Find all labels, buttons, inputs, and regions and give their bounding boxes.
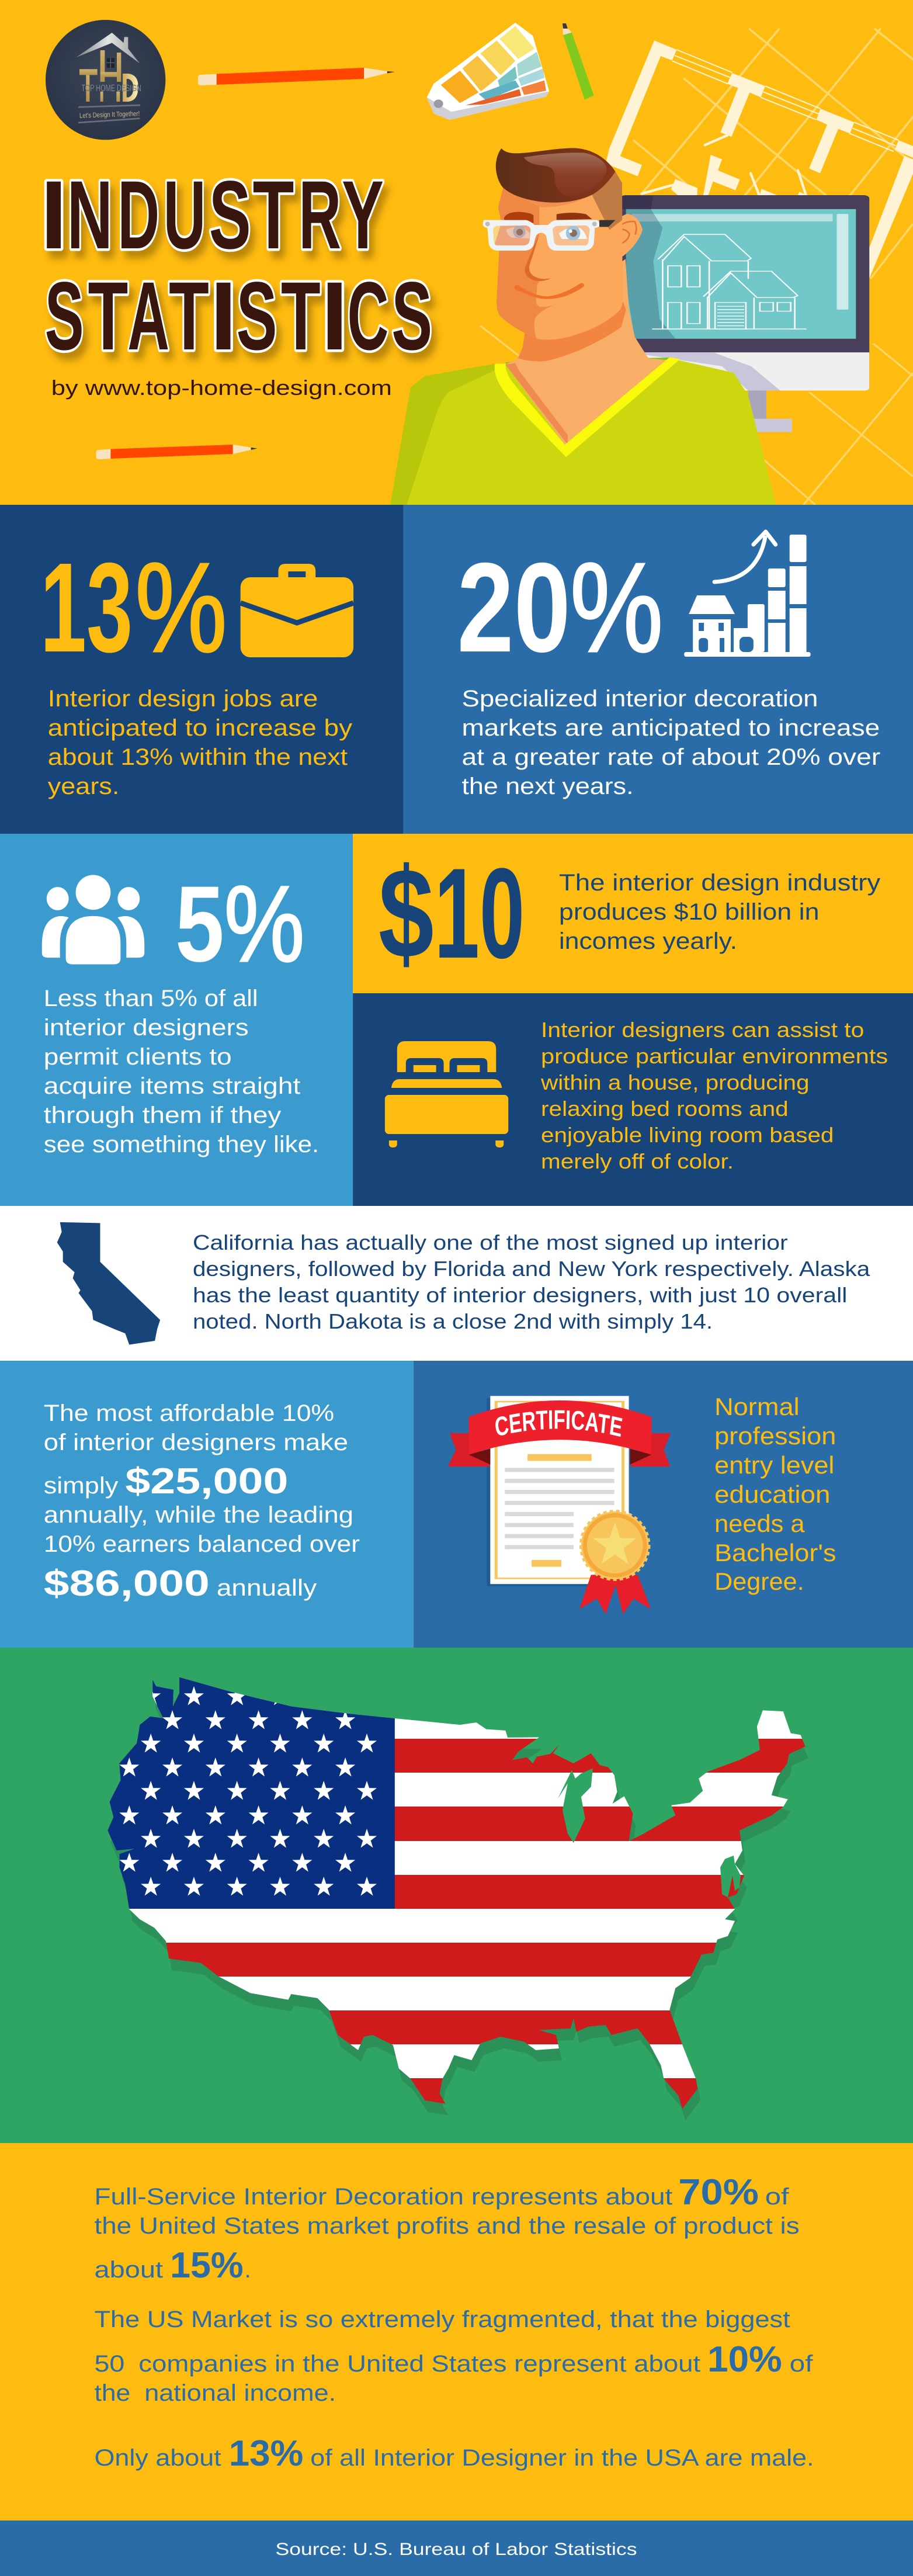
title: I [40, 161, 67, 269]
face [497, 171, 623, 340]
flag map of United States [107, 1677, 805, 2109]
text: male designers: Only about [94, 2445, 221, 2471]
eyes [492, 226, 590, 246]
icon: people [42, 875, 144, 965]
panel: 5% clients [0, 834, 353, 1206]
icon: bed [385, 1041, 508, 1147]
text: education [714, 1393, 836, 1595]
text: education: education [714, 1481, 830, 1508]
lakes and bays [558, 1769, 741, 1898]
text: market share [94, 2172, 800, 2286]
text: earnings: simply [44, 1473, 118, 1499]
text: fragmented market: national income. [144, 2380, 336, 2406]
logo [46, 20, 165, 140]
title: N [67, 161, 113, 269]
text: income [559, 870, 880, 954]
text: environments: within a house, producing [540, 1070, 810, 1094]
title: S [209, 161, 251, 269]
logo: Let's Design It Together! [79, 109, 140, 120]
text: California: has the least quantity of interior designers, with just 10 overall [193, 1283, 847, 1307]
text: market share: of [765, 2184, 790, 2210]
text: jobs: years. [48, 774, 119, 799]
text: environments [540, 1018, 888, 1173]
text: male designers [94, 2433, 814, 2474]
nose and mouth [514, 233, 584, 299]
panel: earnings [0, 1361, 414, 1648]
text: markets: the next years. [461, 774, 634, 799]
stat: 5%: 5 [175, 864, 224, 984]
logo: TOP HOME DESIGN [81, 84, 141, 93]
text: male designers: of all Interior Designer in the USA are male. [310, 2445, 814, 2471]
eyebrows [504, 212, 533, 223]
text: earnings: of interior designers make [44, 1430, 348, 1455]
glasses [483, 220, 615, 251]
title: T [253, 161, 294, 269]
footer: source [0, 2520, 913, 2576]
text: income: The interior design industry [559, 870, 880, 896]
text: earnings: 10% earners balanced over [44, 1531, 360, 1557]
illustration: house drawing on screen [652, 234, 807, 329]
panel: environments [353, 993, 913, 1206]
panel: 20% markets [404, 505, 913, 834]
text: clients: permit clients to [44, 1044, 232, 1070]
illustration: orange pencil top [198, 68, 395, 85]
byline: by www.top-home-design.com [51, 376, 392, 400]
panel: market facts [0, 2143, 913, 2520]
text: market share: about [94, 2257, 163, 2283]
text: fragmented market: 10% [707, 2339, 782, 2380]
panel: USA map [0, 1648, 913, 2143]
title: S [237, 262, 277, 370]
text: market share: Full-Service Interior Decoration represents about [94, 2184, 672, 2210]
text: earnings: $86,000 [44, 1563, 210, 1604]
blueprint floor plan [606, 29, 913, 280]
text: fragmented market: of [790, 2351, 814, 2377]
stat: $10: 10 [435, 841, 525, 985]
text: education: needs a [714, 1510, 805, 1537]
text: environments: relaxing bed rooms and [541, 1097, 789, 1121]
text: markets: at a greater rate of about 20% over [461, 744, 880, 770]
ribbon label: CERTIFICATE [495, 1410, 623, 1437]
title [40, 161, 432, 370]
illustration: colour swatch fan [427, 23, 549, 120]
text: environments: Interior designers can assist to [541, 1018, 864, 1042]
text: environments: merely off of color. [541, 1149, 734, 1173]
title: S [45, 262, 84, 370]
text: education: entry level [714, 1451, 834, 1479]
illustration: orange pencil bottom [96, 445, 258, 459]
text: education: profession [714, 1422, 836, 1450]
text: fragmented market: companies in the United States represent about [138, 2351, 700, 2377]
icon: certificate [447, 1396, 671, 1614]
stat: 20% [457, 537, 663, 679]
ear [606, 214, 643, 258]
illustration: green pencil [563, 23, 594, 99]
text: earnings [44, 1400, 360, 1604]
text: markets: Specialized interior decoration [461, 686, 818, 712]
stat: 5%: % [224, 864, 304, 984]
icon: growing buildings [684, 532, 811, 657]
title: A [127, 262, 169, 370]
title: U [164, 161, 206, 269]
stat: $10 [379, 841, 525, 985]
text: market share: 70% [678, 2172, 759, 2213]
text: California [193, 1230, 870, 1333]
stat: 20%: 20 [457, 537, 571, 679]
title: T [88, 262, 128, 370]
medal [581, 1511, 648, 1579]
text: California: noted. North Dakota is a close 2nd with simply 14. [193, 1309, 713, 1333]
stat: 13%: % [135, 537, 227, 679]
panel: California [0, 1206, 913, 1361]
title: R [298, 161, 341, 269]
title: T [281, 262, 321, 370]
panel: 13% jobs [0, 505, 404, 834]
text: fragmented market: The US Market is so extremely fragmented, that the biggest [94, 2307, 790, 2332]
panel: education [414, 1361, 913, 1648]
text: market share: . [245, 2257, 251, 2283]
text: environments: produce particular environments [541, 1044, 888, 1068]
title: I [210, 262, 237, 370]
text: earnings: $25,000 [125, 1461, 288, 1502]
text: markets: markets are anticipated to increase [461, 715, 880, 741]
text: income: incomes yearly. [559, 928, 737, 954]
text: jobs: anticipated to increase by [48, 715, 352, 741]
text: education: Bachelor's [714, 1539, 836, 1566]
text: education: Normal [714, 1393, 800, 1420]
title: D [117, 161, 159, 269]
text: fragmented market [94, 2307, 814, 2406]
title: S [391, 262, 432, 370]
title: I [321, 262, 348, 370]
text: male designers: 13% [229, 2433, 303, 2474]
text: education: Degree. [714, 1568, 804, 1595]
text: clients [44, 986, 319, 1157]
text: clients: through them if they [44, 1102, 281, 1128]
title: C [348, 262, 388, 370]
text: fragmented market: the [94, 2380, 130, 2406]
stat: 20%: % [570, 537, 663, 679]
stat: $10: $ [379, 841, 434, 985]
stat: 13%: 13 [40, 537, 133, 679]
text: California: designers, followed by Florida and New York respectively. Alaska [193, 1257, 870, 1281]
text: earnings: annually [217, 1575, 317, 1601]
text: earnings: The most affordable 10% [44, 1400, 334, 1426]
text: clients: acquire items straight [44, 1073, 300, 1099]
title: T [169, 262, 209, 370]
text: California: California has actually one of the most signed up interior [193, 1230, 788, 1254]
text: clients: Less than 5% of all [44, 986, 258, 1011]
icon: briefcase [241, 564, 353, 657]
text: clients: interior designers [44, 1015, 249, 1041]
title: Y [342, 161, 384, 269]
icon: California map [57, 1222, 160, 1345]
text: environments: enjoyable living room based [541, 1123, 834, 1147]
illustration: man with glasses [390, 148, 776, 505]
panel: header [0, 0, 913, 505]
map shadow [110, 1689, 808, 2120]
illustration: computer monitor [620, 195, 869, 432]
text: markets [461, 686, 880, 799]
text: earnings: annually, while the leading [44, 1502, 353, 1528]
text: jobs: Interior design jobs are [48, 686, 318, 712]
text: market share: 15% [170, 2245, 244, 2286]
text: income: produces $10 billion in [559, 899, 820, 925]
hair [496, 148, 615, 203]
text: market share: the United States market profits and the resale of product is [94, 2213, 800, 2239]
text: fragmented market: 50 [94, 2351, 124, 2377]
footer: source: Source: U.S. Bureau of Labor Statistics [275, 2540, 637, 2559]
text: clients: see something they like. [44, 1132, 319, 1157]
text: jobs: about 13% within the next [48, 744, 348, 770]
text: jobs [48, 686, 352, 799]
stat: 5% [175, 864, 304, 984]
ribbon label [495, 1410, 623, 1437]
panel: $10 billion [353, 834, 913, 993]
